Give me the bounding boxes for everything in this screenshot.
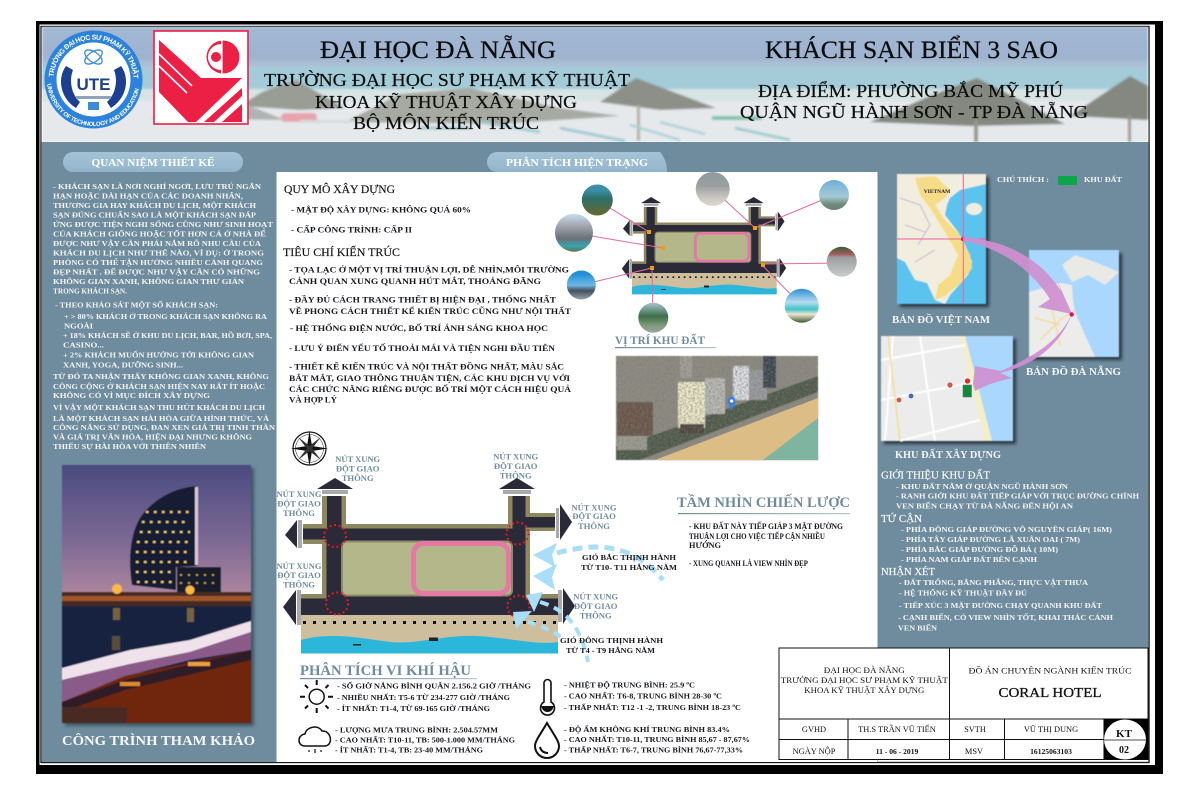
text block: design concept: - KHÁCH SẠN LÀ NƠI NGHỈ NGƠI, LƯU TRÚ NGẮN bbox=[53, 181, 261, 191]
text block: design concept: CÔNG CỘNG Ở KHÁCH SẠN HIỆN NAY RẤT ÍT HOẶC bbox=[53, 381, 265, 391]
text block: site introduction: - KHU ĐẤT NẰM Ở QUẬN NGŨ HÀNH SƠN bbox=[896, 481, 1068, 491]
header: university title: BỘ MÔN KIẾN TRÚC bbox=[353, 112, 539, 133]
text block: building scale bbox=[284, 182, 471, 234]
photo: aerial view of site bbox=[616, 356, 818, 460]
road surface bbox=[301, 496, 558, 615]
labels: wind directions: GIÓ BẮC THỊNH HÀNH bbox=[582, 552, 676, 562]
text block: design concept: CASINO... bbox=[63, 340, 104, 350]
text block: surroundings bbox=[881, 513, 1112, 564]
text block: site introduction: GIỚI THIỆU KHU ĐẤT bbox=[881, 468, 991, 482]
icon: thermometer bbox=[540, 680, 554, 715]
labels: traffic conflict nodes: NÚT XUNG bbox=[493, 452, 538, 462]
heading: design concept bbox=[63, 152, 243, 172]
text block: design concept: CÔNG NĂNG SỬ DỤNG, ĐAN XEN GIÁ TRỊ TINH THẦN bbox=[53, 422, 275, 432]
labels: traffic conflict nodes: ĐỘT GIAO bbox=[572, 511, 616, 521]
title block: credits: SVTH bbox=[964, 725, 986, 734]
text block: remarks: VEN BIỂN bbox=[898, 622, 937, 632]
text block: design concept: THƯƠNG GIA HAY KHÁCH DU LỊCH, MỘT KHÁCH bbox=[53, 200, 256, 210]
text block: remarks bbox=[881, 566, 1113, 632]
labels: traffic conflict nodes: ĐỘT GIAO bbox=[277, 498, 321, 508]
text block: surroundings: - PHÍA NAM GIÁP ĐẤT BÊN CẠNH bbox=[901, 554, 1037, 564]
white central panel bbox=[276, 172, 878, 762]
text: sunshine: - ÍT NHẤT: T1-4, TỪ 69-165 GIỜ /THÁNG bbox=[337, 703, 490, 713]
text block: remarks: - TIẾP XÚC 3 MẶT ĐƯỜNG CHẠY QUANH KHU ĐẤT bbox=[899, 600, 1103, 610]
text: sunshine: - NHIỀU NHẤT: T5-6 TỪ 234-277 GIỜ /THÁNG bbox=[337, 692, 510, 702]
text block: surroundings: - PHÍA ĐÔNG GIÁP ĐƯỜNG VÕ NGUYÊN GIÁP( 16M) bbox=[901, 524, 1112, 534]
heading: microclimate: PHÂN TÍCH VI KHÍ HẬU bbox=[300, 662, 471, 679]
text: temperature: - THẤP NHẤT: T12 -1 -2, TRUNG BÌNH 18-23 ºC bbox=[564, 702, 741, 712]
icon: water drop bbox=[535, 723, 559, 758]
sand and sea bbox=[301, 615, 558, 654]
text block: design concept: CỦA KHÁCH GIỐNG HOẶC TỐT HƠN CẢ Ở NHÀ ĐỂ bbox=[53, 228, 266, 238]
text block: building scale: - CẤP CÔNG TRÌNH: CẤP II bbox=[291, 224, 412, 234]
text block: design concept: KHÔNG GIAN XANH, KHÔNG GIAN THƯ GIẢN bbox=[53, 276, 244, 286]
header: university title: KHOA KỸ THUẬT XÂY DỰNG bbox=[315, 91, 577, 112]
header beach photo bbox=[42, 27, 1148, 142]
title block: university bbox=[781, 665, 948, 695]
labels: traffic conflict nodes: NÚT XUNG bbox=[335, 454, 380, 464]
sheet number bbox=[1104, 719, 1148, 760]
text block: architecture criteria: - TỌA LẠC Ở MỘT VỊ TRÍ THUẬN LỢI, DỄ NHÌN,MÔI TRƯỜNG bbox=[289, 264, 570, 274]
labels: wind directions: GIÓ ĐÔNG THỊNH HÀNH bbox=[560, 635, 663, 645]
text block: remarks: - HỆ THỐNG KỸ THUẬT ĐẦY ĐỦ bbox=[899, 588, 1027, 598]
map: Vietnam bbox=[897, 174, 989, 307]
labels: traffic conflict nodes: NÚT XUNG bbox=[573, 592, 618, 602]
icon: compass rose bbox=[291, 431, 328, 466]
text block: remarks: - CẠNH BIỂN, CÓ VIEW NHÌN TỐT, KHAI THÁC CẢNH bbox=[898, 612, 1113, 622]
sheet number: KT bbox=[1116, 728, 1133, 740]
labels: wind directions: TỪ T10- T11 HẰNG NĂM bbox=[581, 562, 677, 572]
labels: traffic conflict nodes: THÔNG bbox=[283, 580, 315, 590]
text block: design concept: PHÒNG CÓ THỂ TẬN HƯỞNG NHIỀU CẢNH QUANG bbox=[53, 257, 263, 267]
labels: traffic conflict nodes: ĐỘT GIAO bbox=[277, 570, 321, 580]
legend: KHU ĐẤT bbox=[1084, 174, 1123, 184]
road plan diagram bbox=[283, 478, 575, 654]
panel: site maps bbox=[881, 174, 1123, 461]
labels: traffic conflict nodes: ĐỘT GIAO bbox=[494, 461, 538, 471]
map: building site bbox=[881, 336, 1016, 444]
text block: remarks: NHẬN XÉT bbox=[881, 566, 936, 578]
text: humidity: - CAO NHẤT: T10-11, TRUNG BÌNH 85,67 - 87,67% bbox=[564, 734, 750, 744]
title block: university: KHOA KỸ THUẬT XÂY DỰNG bbox=[804, 685, 924, 695]
text block: architecture criteria: - LƯU Ý ĐIẾN YẾU TỐ THOẢI MÁI VÀ TIỆN NGHI ĐẦU TIÊN bbox=[289, 343, 555, 353]
title block: credits: 16125063103 bbox=[1030, 747, 1072, 756]
text block: site introduction: VEN BIỂN CHẠY TỪ ĐÀ NẴNG ĐẾN HỘI AN bbox=[896, 500, 1073, 510]
icon: sun bbox=[300, 680, 333, 713]
text block: architecture criteria: VỀ PHONG CÁCH THIẾT KẾ KIẾN TRÚC CŨNG NHƯ NỘI THẤT bbox=[289, 306, 571, 316]
pink building footprint bbox=[414, 544, 508, 594]
text: humidity: - ĐỘ ẨM KHÔNG KHÍ TRUNG BÌNH 83.4% bbox=[564, 724, 730, 734]
text block: building scale: QUY MÔ XÂY DỰNG bbox=[284, 182, 395, 196]
text block: design concept: LÀ MỘT KHÁCH SẠN HÀI HÒA GIỮA HÌNH THỨC, VÀ bbox=[53, 413, 269, 423]
labels: traffic conflict nodes: THÔNG bbox=[283, 508, 315, 518]
arrow: Da Nang to site bbox=[973, 314, 1072, 391]
title block: credits: GVHD bbox=[802, 725, 826, 734]
text block: design concept: HẠN HOẶC DÀI HẠN CỦA CÁC DOANH NHÂN, bbox=[53, 190, 243, 200]
header: university title bbox=[264, 35, 630, 133]
road arrows bbox=[283, 478, 575, 625]
text: humidity bbox=[564, 724, 750, 754]
title block: project: CORAL HOTEL bbox=[998, 686, 1102, 701]
text block: design concept: TỪ ĐÓ TA NHẬN THẤY KHÔNG GIAN XANH, KHÔNG bbox=[53, 371, 269, 381]
text block: design concept: TRONG KHÁCH SẠN. bbox=[53, 286, 127, 296]
site lot bbox=[342, 542, 512, 596]
site plan with photo callouts bbox=[555, 172, 857, 333]
panel: strategic vision bbox=[677, 494, 850, 568]
text block: design concept: + > 80% KHÁCH Ở TRONG KHÁCH SẠN KHÔNG RA bbox=[64, 311, 267, 321]
caption: reference building: CÔNG TRÌNH THAM KHẢO bbox=[62, 732, 255, 749]
text block: design concept: KHÁCH DU LỊCH NHƯ THẾ NÀO, VÍ DỤ: Ở TRONG bbox=[53, 248, 264, 258]
text: temperature: - NHIỆT ĐỘ TRUNG BÌNH: 25.9 ºC bbox=[564, 680, 695, 690]
text block: design concept: NGOÀI bbox=[64, 320, 93, 330]
title block: university: ĐẠI HỌC ĐÀ NẴNG bbox=[824, 665, 905, 675]
logo: UTE university: UTE bbox=[76, 75, 110, 94]
text block: architecture criteria: VÀ HỢP LÝ bbox=[289, 394, 337, 404]
header: project title: ĐỊA ĐIỂM: PHƯỜNG BẮC MỸ PHÚ bbox=[758, 80, 1063, 101]
labels: traffic conflict nodes: THÔNG bbox=[342, 473, 374, 483]
text block: design concept: VÌ VẬY MỘT KHÁCH SẠN THU HÚT KHÁCH DU LỊCH bbox=[53, 402, 265, 412]
title block: credits: TH.S TRẦN VŨ TIẾN bbox=[858, 724, 936, 734]
text: temperature bbox=[564, 680, 741, 712]
text: rainfall: - CAO NHẤT: T10-11, TB: 500-1.000 MM/THÁNG bbox=[335, 734, 515, 744]
panel: strategic vision: - KHU ĐẤT NÀY TIẾP GIÁP 3 MẶT ĐƯỜNG bbox=[689, 521, 843, 531]
heading: current state analysis bbox=[487, 152, 667, 172]
text block: architecture criteria: CẢNH QUAN XUNG QUANH HÚT MẮT, THOÁNG ĐÃNG bbox=[289, 276, 542, 286]
text block: surroundings: - PHÍA BẮC GIÁP ĐƯỜNG ĐỖ BÁ ( 10M) bbox=[901, 544, 1058, 554]
text block: site introduction bbox=[881, 468, 1139, 510]
panel: strategic vision: - XUNG QUANH LÀ VIEW NHÌN ĐẸP bbox=[689, 558, 808, 568]
header: university title: TRƯỜNG ĐẠI HỌC SƯ PHẠM KỸ THUẬT bbox=[264, 69, 630, 90]
text: rainfall: - ÍT NHẤT: T1-4, TB: 23-40 MM/THÁNG bbox=[335, 744, 483, 754]
text block: site introduction: - RANH GIỚI KHU ĐẤT TIẾP GIÁP VỚI TRỤC ĐƯỜNG CHÍNH bbox=[896, 490, 1139, 500]
text: rainfall bbox=[335, 724, 515, 754]
labels: traffic conflict nodes: THÔNG bbox=[500, 471, 532, 481]
text block: design concept: ĐƯỢC NHƯ VẬY CẦN PHẢI NẮM RÕ NHU CẦU CỦA bbox=[53, 238, 261, 248]
legend bbox=[997, 174, 1123, 185]
logo: UTE university bbox=[44, 30, 142, 128]
text block: design concept: XANH, YOGA, DƯỠNG SINH... bbox=[63, 360, 183, 370]
panel: microclimate analysis bbox=[299, 662, 750, 758]
title block: project: ĐỒ ÁN CHUYÊN NGÀNH KIẾN TRÚC bbox=[968, 666, 1132, 676]
text: sunshine bbox=[337, 680, 531, 713]
header: project title: QUẬN NGŨ HÀNH SƠN - TP ĐÀ NẴNG bbox=[740, 101, 1088, 122]
text block: design concept: VÀ GIÁ TRỊ VĂN HÓA, HIỆN ĐẠI NHƯNG KHÔNG bbox=[53, 432, 252, 442]
labels: traffic conflict nodes: THÔNG bbox=[578, 521, 610, 531]
title block: project bbox=[968, 666, 1132, 701]
labels: traffic conflict nodes: ĐỘT GIAO bbox=[336, 464, 380, 474]
heading: current state analysis: PHÂN TÍCH HIỆN TRẠNG bbox=[506, 156, 648, 169]
caption: site map: KHU ĐẤT XÂY DỰNG bbox=[895, 448, 1001, 461]
text block: design concept: ĐẸP NHẤT . ĐỂ ĐƯỢC NHƯ VẬY CẦN CÓ NHỮNG bbox=[53, 266, 260, 276]
title block: credits: 11 - 06 - 2019 bbox=[876, 747, 919, 756]
arrows: prevailing winds bbox=[513, 543, 663, 662]
panel: strategic vision: TẦM NHÌN CHIẾN LƯỢC bbox=[677, 494, 850, 511]
text block: architecture criteria: CÁC CHỨC NĂNG RIÊNG ĐƯỢC BỐ TRÍ MỘT CÁCH HIỆU QUẢ bbox=[289, 384, 571, 394]
text block: architecture criteria bbox=[283, 244, 571, 404]
text: humidity: - THẤP NHẤT: T6-7, TRUNG BÌNH 76,67-77,33% bbox=[564, 744, 743, 754]
text block: design concept: + 2% KHÁCH MUỐN HƯỚNG TỚI KHÔNG GIAN bbox=[63, 350, 254, 360]
sheet number: 02 bbox=[1119, 745, 1129, 756]
logo: UTE university: UNIVERSITY OF TECHNOLOGY AND EDUCATION bbox=[47, 84, 139, 126]
text: temperature: - CAO NHẤT: T6-8, TRUNG BÌNH 28-30 ºC bbox=[564, 690, 722, 700]
text: sunshine: - SỐ GIỜ NẮNG BÌNH QUÂN 2.156.2 GIỜ /THÁNG bbox=[337, 680, 531, 690]
text block: design concept: THIẾU SỰ HÀI HÒA VỚI THIÊN NHIÊN bbox=[53, 441, 206, 451]
road edges bbox=[301, 496, 558, 618]
caption: Da Nang map: BẢN ĐỒ ĐÀ NẴNG bbox=[1026, 365, 1121, 378]
logo: UTE university: TRƯỜNG ĐẠI HỌC SƯ PHẠM KỸ THUẬT bbox=[48, 34, 140, 78]
text block: remarks: - ĐẤT TRỐNG, BẰNG PHẲNG, THỰC VẬT THƯA bbox=[899, 577, 1088, 587]
panel: design concept bbox=[53, 152, 275, 749]
text block: design concept: KHÔNG CÓ VÌ MỤC ĐÍCH XÂY DỰNG bbox=[53, 390, 210, 400]
photo: reference building bbox=[62, 465, 254, 726]
text: rainfall: - LƯỢNG MƯA TRUNG BÌNH: 2.504.57MM bbox=[335, 724, 498, 734]
text block: design concept bbox=[53, 181, 275, 451]
traffic conflict points bbox=[324, 522, 530, 618]
heading: site location: VỊ TRÍ KHU ĐẤT bbox=[615, 332, 705, 347]
text block: architecture criteria: BẮT MẮT, GIAO THÔNG THUẬN TIỆN, CÁC KHU DỊCH VỤ VỚI bbox=[289, 373, 570, 383]
arrow: Vietnam to Da Nang bbox=[963, 237, 1072, 314]
text block: design concept: ỨNG ĐƯỢC TIỆN NGHI SỐNG CŨNG NHƯ SINH HOẠT bbox=[53, 219, 274, 229]
icon: rain cloud bbox=[299, 727, 330, 753]
title block: credits: VŨ THỊ DUNG bbox=[1024, 724, 1078, 734]
header: university title: ĐẠI HỌC ĐÀ NẴNG bbox=[320, 35, 556, 64]
heading: design concept: QUAN NIỆM THIẾT KẾ bbox=[92, 156, 214, 169]
text block: architecture criteria: - THIẾT KẾ KIẾN TRÚC VÀ NỘI THẤT ĐỒNG NHẤT, MÀU SẮC bbox=[289, 362, 564, 372]
text block: design concept: - THEO KHẢO SÁT MỘT SỐ KHÁCH SẠN: bbox=[55, 300, 218, 310]
logo: red construction faculty bbox=[154, 31, 248, 124]
labels: traffic conflict nodes: NÚT XUNG bbox=[276, 489, 322, 499]
labels: traffic conflict nodes bbox=[276, 452, 618, 621]
text block: surroundings: - PHÍA TÂY GIÁP ĐƯỜNG LÃ XUÂN OAI ( 7M) bbox=[901, 534, 1080, 544]
text block: architecture criteria: - ĐẦY ĐỦ CÁCH TRANG THIẾT BỊ HIỆN ĐẠI , THỐNG NHẤT bbox=[289, 294, 556, 304]
text block: architecture criteria: TIÊU CHÍ KIẾN TRÚC bbox=[283, 244, 400, 259]
blue background panel bbox=[42, 142, 1148, 762]
map: Da Nang bbox=[1029, 250, 1122, 360]
panel: strategic vision: HƯỚNG bbox=[689, 540, 721, 550]
text block: surroundings: TỨ CẬN bbox=[881, 513, 922, 525]
panel: strategic vision: THUẬN LỢI CHO VIỆC TIẾP CẬN NHIỀU bbox=[689, 531, 825, 541]
header: project title bbox=[740, 35, 1088, 122]
legend: CHÚ THÍCH : bbox=[997, 174, 1049, 184]
labels: wind directions bbox=[560, 552, 677, 655]
caption: Vietnam map: BẢN ĐỒ VIỆT NAM bbox=[892, 313, 991, 326]
text block: architecture criteria: - HỆ THỐNG ĐIỆN NƯỚC, BỐ TRÍ ÁNH SÁNG KHOA HỌC bbox=[290, 323, 548, 333]
title block: university: TRƯỜNG ĐẠI HỌC SƯ PHẠM KỸ THUẬT bbox=[781, 675, 948, 685]
title block bbox=[779, 648, 1148, 760]
map: Vietnam: VIETNAM bbox=[924, 189, 951, 195]
header: project title: KHÁCH SẠN BIỂN 3 SAO bbox=[765, 35, 1058, 64]
title block: credits: NGÀY NỘP bbox=[793, 746, 836, 756]
text block: building scale: - MẬT ĐỘ XÂY DỰNG: KHÔNG QUÁ 60% bbox=[291, 204, 471, 214]
title block: credits: MSV bbox=[965, 747, 983, 756]
labels: traffic conflict nodes: NÚT XUNG bbox=[572, 502, 617, 512]
labels: traffic conflict nodes: THÔNG bbox=[580, 611, 612, 621]
text block: design concept: + 18% KHÁCH SẼ Ở KHU DU LỊCH, BAR, HỒ BƠI, SPA, bbox=[63, 330, 272, 340]
labels: traffic conflict nodes: ĐỘT GIAO bbox=[574, 601, 618, 611]
labels: traffic conflict nodes: NÚT XUNG bbox=[276, 561, 322, 571]
labels: wind directions: TỪ T4 - T9 HẰNG NĂM bbox=[566, 645, 655, 655]
text block: design concept: SẠN ĐÚNG CHUẨN SAO LÀ MỘT KHÁCH SẠN ĐÁP bbox=[53, 210, 256, 220]
title block: credits bbox=[793, 724, 1078, 756]
